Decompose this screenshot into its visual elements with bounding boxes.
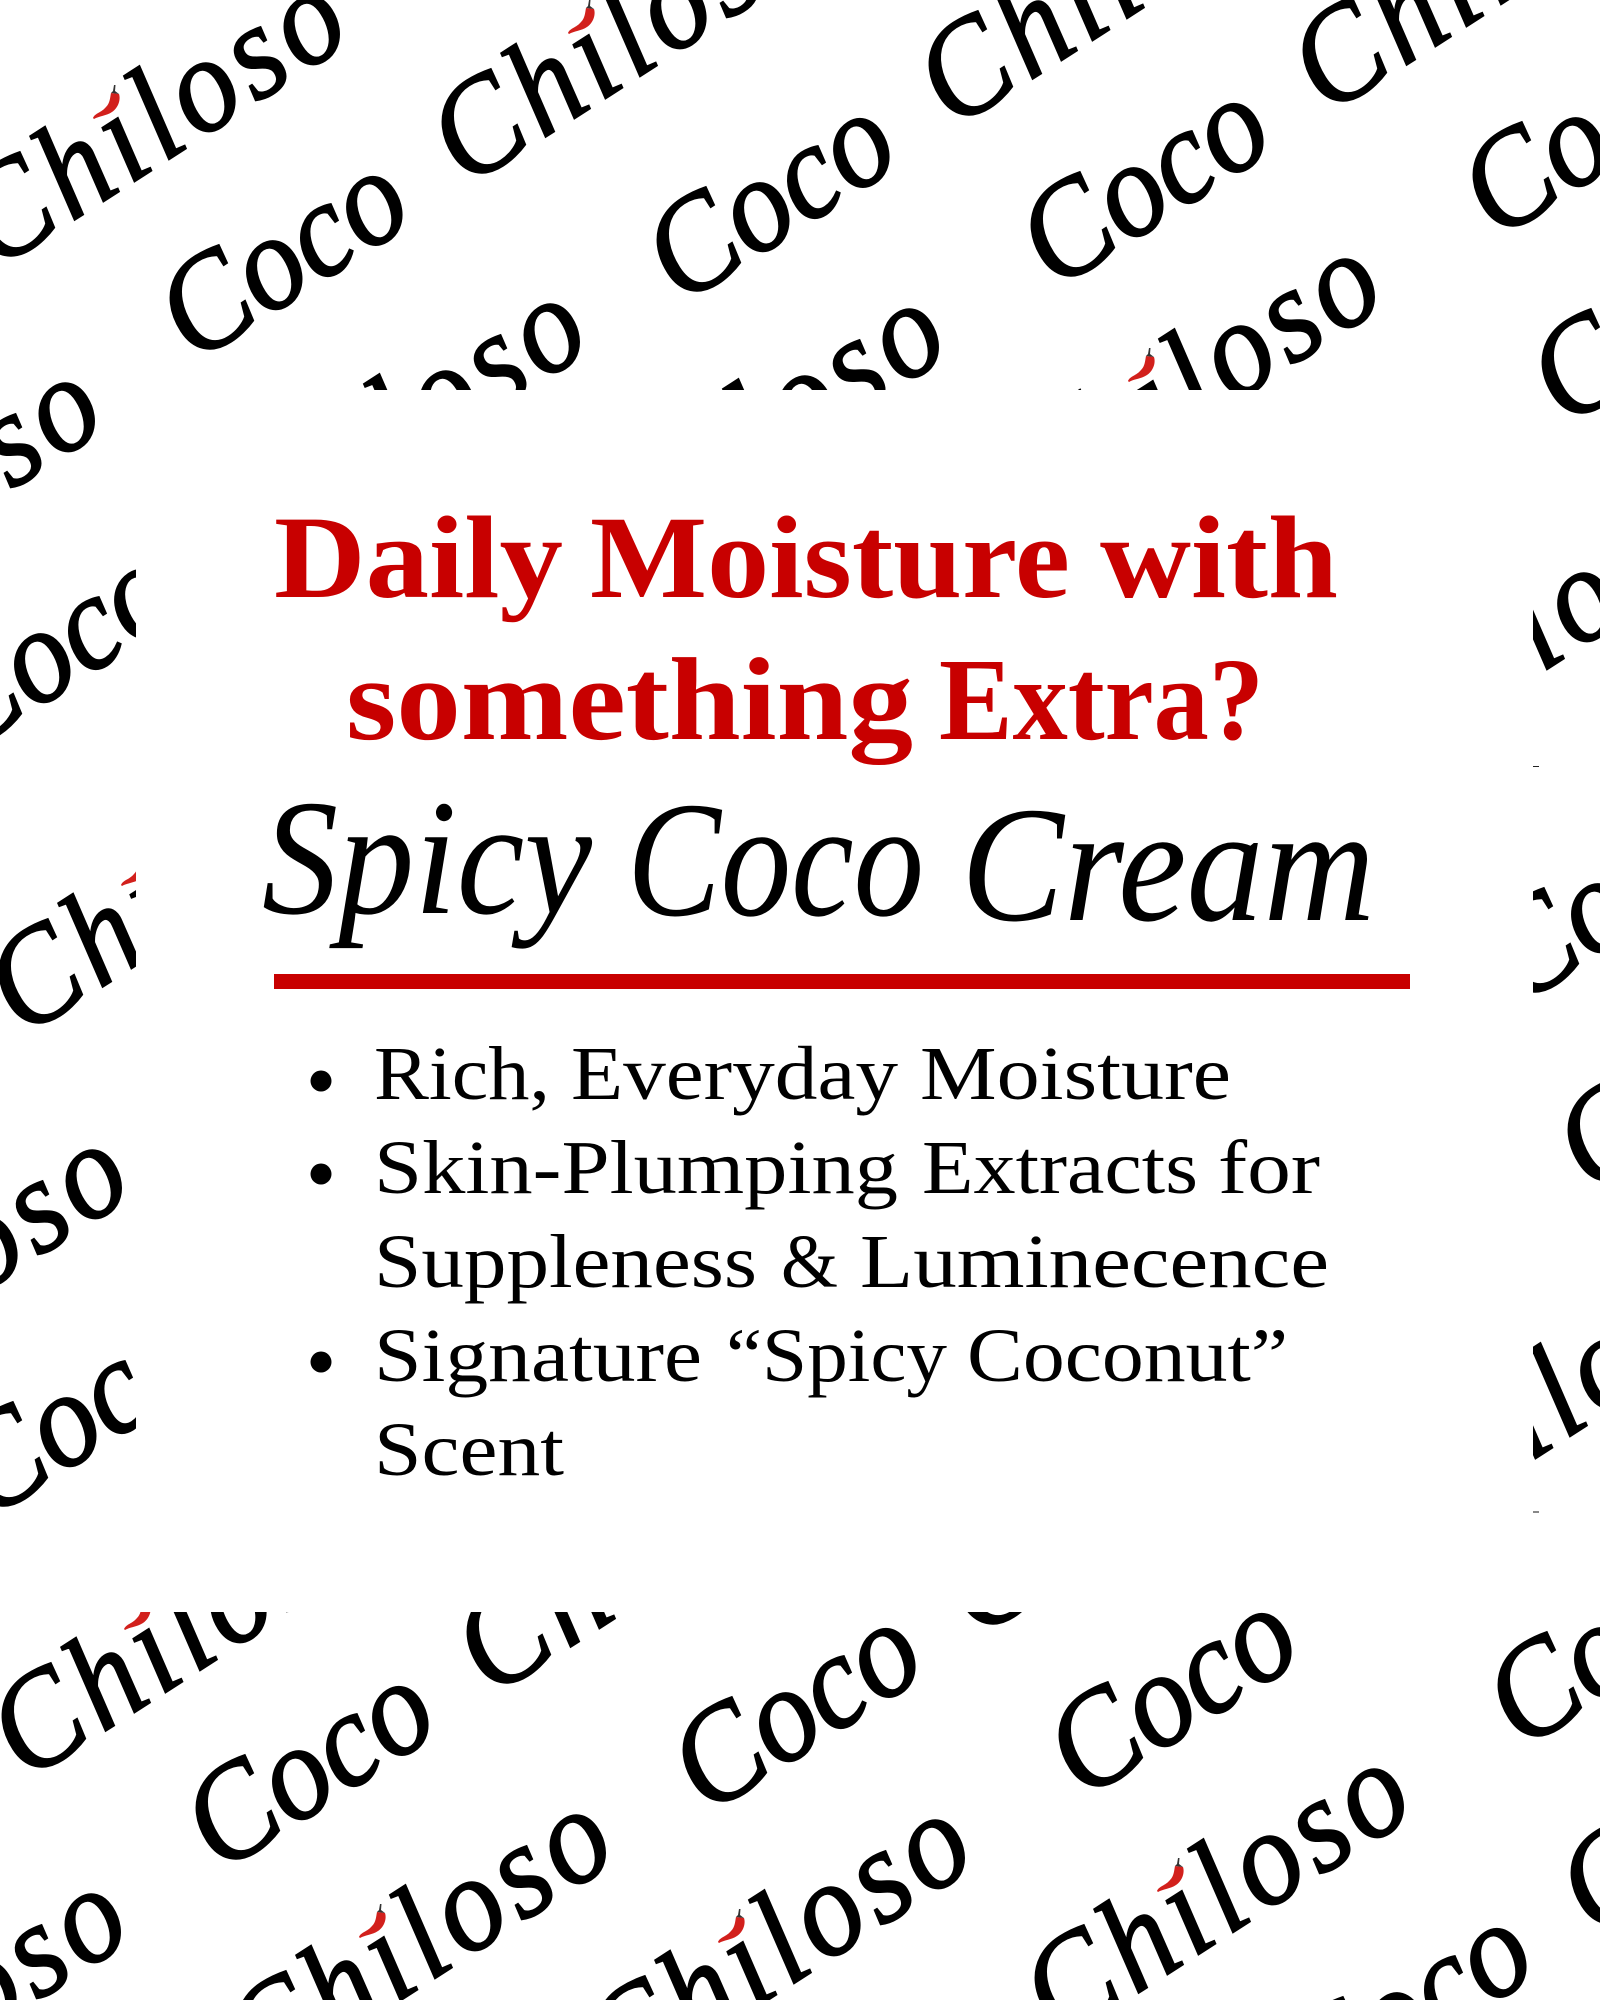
pattern: top brand watermark: Chıloso — [529, 248, 976, 609]
pattern: left strip watermark — [0, 512, 405, 1546]
pattern: top brand watermark: Coco — [129, 119, 434, 389]
bullet 3: Coconut” — [967, 1314, 1288, 1398]
bullet 2: Extracts — [922, 1126, 1198, 1210]
bullet 1: Rich, — [374, 1032, 550, 1116]
bullet 1: Moisture — [920, 1032, 1231, 1116]
heading: red question: Daily — [274, 492, 563, 623]
benefits list — [310, 1032, 1329, 1492]
pattern: top brand watermark: Coco — [990, 46, 1295, 316]
bullet 3 — [310, 1314, 1288, 1492]
bullet 2: Suppleness — [374, 1220, 757, 1304]
red divider under product name — [274, 974, 1410, 989]
product name: Cream — [961, 773, 1375, 956]
pattern: right strip watermark — [1308, 92, 1600, 1573]
bullet 1: Everyday — [571, 1032, 898, 1116]
pattern: bottom brand watermark: Coco — [642, 1571, 947, 1841]
pattern: bottom brand watermark — [0, 1612, 1600, 2000]
bullet 2: Skin-Plumping — [374, 1126, 898, 1210]
heading: red question: something — [346, 634, 913, 765]
bullet 1 — [310, 1032, 1231, 1116]
bullet 2: for — [1218, 1126, 1320, 1210]
pattern: bottom brand watermark: Chıloso — [426, 1362, 873, 1723]
bullet 2: Luminecence — [860, 1220, 1329, 1304]
pattern: bottom brand watermark: Coco — [155, 1629, 460, 1899]
bullet 3: Signature — [374, 1314, 702, 1398]
heading: red question — [274, 492, 1338, 765]
pattern: top brand watermark: Chıloso — [965, 198, 1412, 559]
pattern: bottom brand watermark: Chıloso — [912, 1303, 1359, 1664]
heading: red question: Moisture — [590, 492, 1070, 623]
bullet 3: Scent — [374, 1408, 564, 1492]
panel: white content area — [136, 390, 1533, 1612]
product name: Coco — [627, 768, 924, 951]
bullet 2 — [310, 1126, 1329, 1304]
bullet 2: & — [781, 1220, 838, 1304]
heading: red question: with — [1100, 492, 1338, 623]
bullet 3: “Spicy — [726, 1314, 947, 1398]
pattern: top brand watermark: Chıloso — [170, 243, 617, 604]
pattern: top brand watermark — [0, 0, 1600, 683]
product name — [262, 766, 1375, 956]
heading: red question: Extra? — [939, 634, 1264, 765]
pattern: top brand watermark: Coco — [616, 61, 921, 331]
product name: Spicy — [262, 766, 593, 949]
pattern: bottom brand watermark: Coco — [1018, 1556, 1323, 1826]
